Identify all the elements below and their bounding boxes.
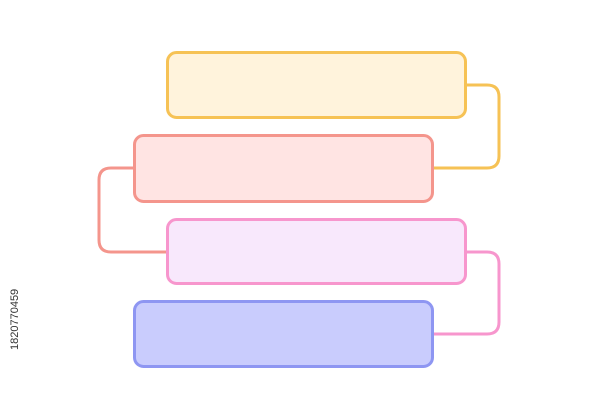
stock id text: 1820770459 (9, 289, 21, 350)
box 3: pink (168, 220, 466, 284)
connector: box2 to box3 (99, 168, 166, 252)
connector: box1 to box2 (434, 85, 499, 168)
connector: box3 to box4 (434, 252, 499, 334)
box 2: red (134, 136, 432, 202)
box 1: yellow (168, 52, 466, 118)
box 4: blue (134, 302, 432, 366)
